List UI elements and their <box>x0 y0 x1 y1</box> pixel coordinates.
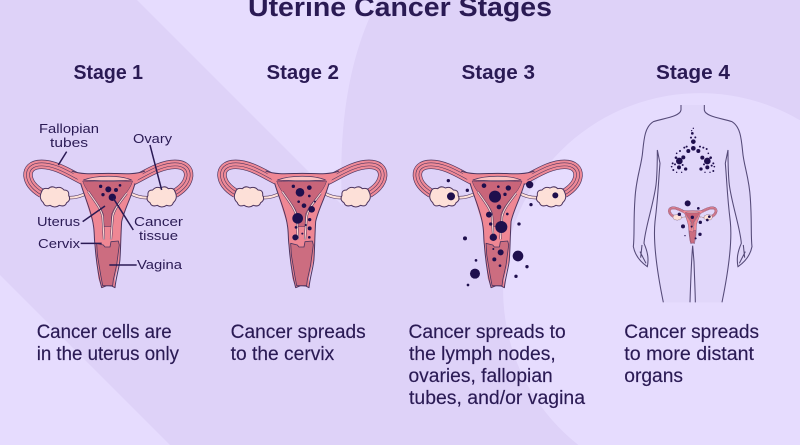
icon: small uterus <box>669 208 716 244</box>
description: stage 2: to the cervix <box>231 344 335 365</box>
description: stage 1: in the uterus only <box>37 344 179 365</box>
panel: stage 4 <box>624 62 759 387</box>
body figure with metastases <box>633 105 752 302</box>
labels: Fallopian <box>39 121 99 136</box>
description: stage 3: tubes, and/or vagina <box>409 388 585 409</box>
heading: stage 1: Stage 1 <box>74 62 143 84</box>
description: stage 3: ovaries, fallopian <box>408 366 553 387</box>
icon: uterus with cervix spread <box>222 164 383 288</box>
panel: stage 2 <box>222 62 383 365</box>
labels: tissue <box>139 228 178 243</box>
description: stage 3: Cancer spreads to <box>408 322 566 343</box>
description: stage 1 <box>37 322 179 365</box>
pelvic metastases <box>678 200 711 239</box>
description: stage 4: Cancer spreads <box>624 322 759 343</box>
lung metastases <box>671 128 715 173</box>
labels: Ovary <box>133 131 173 146</box>
labels: Uterus <box>37 214 81 229</box>
description: stage 4 <box>624 322 759 387</box>
labels: tubes <box>50 135 89 150</box>
description: stage 3: the lymph nodes, <box>409 344 556 365</box>
cancer dots <box>292 185 316 240</box>
icon: uterus <box>28 164 189 288</box>
labels: Cervix <box>38 236 81 251</box>
description: stage 1: Cancer cells are <box>37 322 172 343</box>
panel: stage 1 <box>28 62 189 365</box>
cancer tissue dots <box>99 184 121 201</box>
description: stage 4: to more distant <box>624 344 755 365</box>
panel: stage 3 <box>408 62 585 409</box>
heading: stage 2: Stage 2 <box>266 62 339 84</box>
labels: Cancer <box>134 214 184 229</box>
leader lines <box>58 145 162 265</box>
cancer dots <box>447 179 558 286</box>
labels <box>37 121 184 272</box>
heading: stage 4: Stage 4 <box>656 62 731 84</box>
labels: Vagina <box>137 257 183 272</box>
description: stage 2 <box>231 322 366 365</box>
description: stage 4: organs <box>624 366 683 387</box>
uterus diagram with labels <box>28 121 189 288</box>
icon: human body outline <box>633 105 752 302</box>
description: stage 3 <box>408 322 585 409</box>
heading: stage 3: Stage 3 <box>462 62 535 84</box>
description: stage 2: Cancer spreads <box>231 322 366 343</box>
icon: uterus with lymph spread <box>417 164 578 288</box>
